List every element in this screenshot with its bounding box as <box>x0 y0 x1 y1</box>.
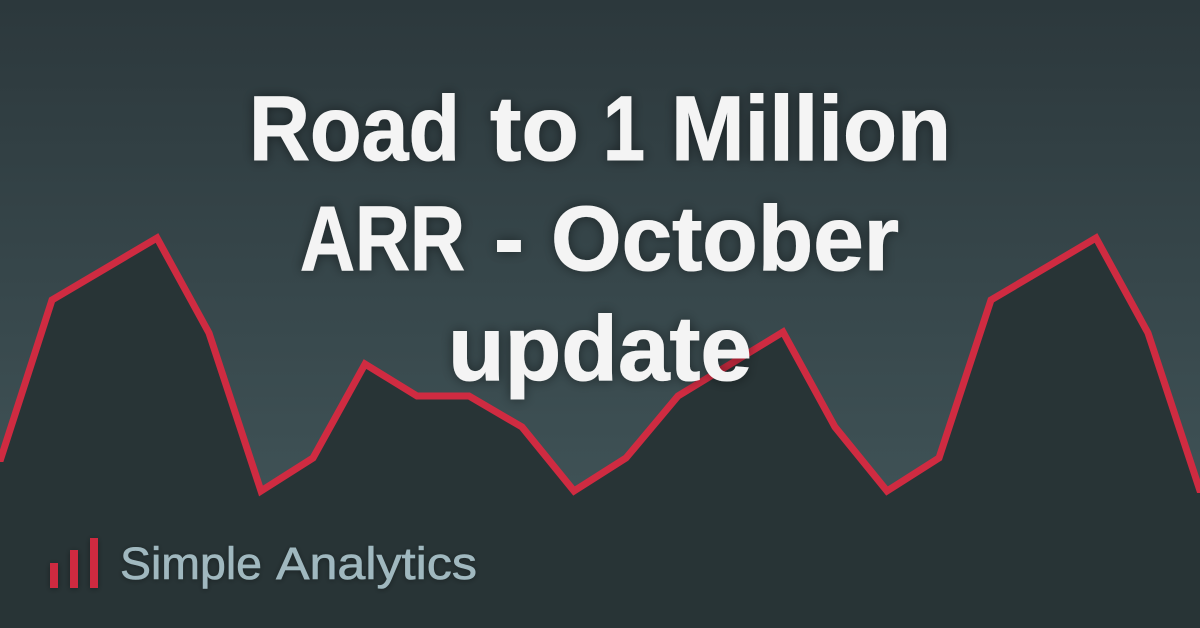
title line 1 <box>249 78 951 180</box>
title line 3: update <box>448 298 752 400</box>
title line 1: Road <box>249 78 460 180</box>
title line 1: 1 <box>603 78 645 180</box>
chart line <box>0 238 1200 521</box>
title line 1: to <box>490 78 579 180</box>
logo <box>50 538 477 589</box>
title line 2 <box>300 188 899 290</box>
title line 2: ARR <box>300 188 465 290</box>
icon: bar chart logo <box>50 538 98 588</box>
brand name: Simple <box>120 538 262 589</box>
brand name <box>120 538 477 589</box>
line chart <box>0 238 1200 628</box>
chart line end masks <box>0 462 1200 523</box>
title line 1: Million <box>671 78 951 180</box>
title line 2: - <box>494 188 524 290</box>
chart area fill <box>0 238 1200 628</box>
title line 2: October <box>551 188 899 290</box>
brand name: Analytics <box>276 538 477 589</box>
title <box>249 78 951 400</box>
